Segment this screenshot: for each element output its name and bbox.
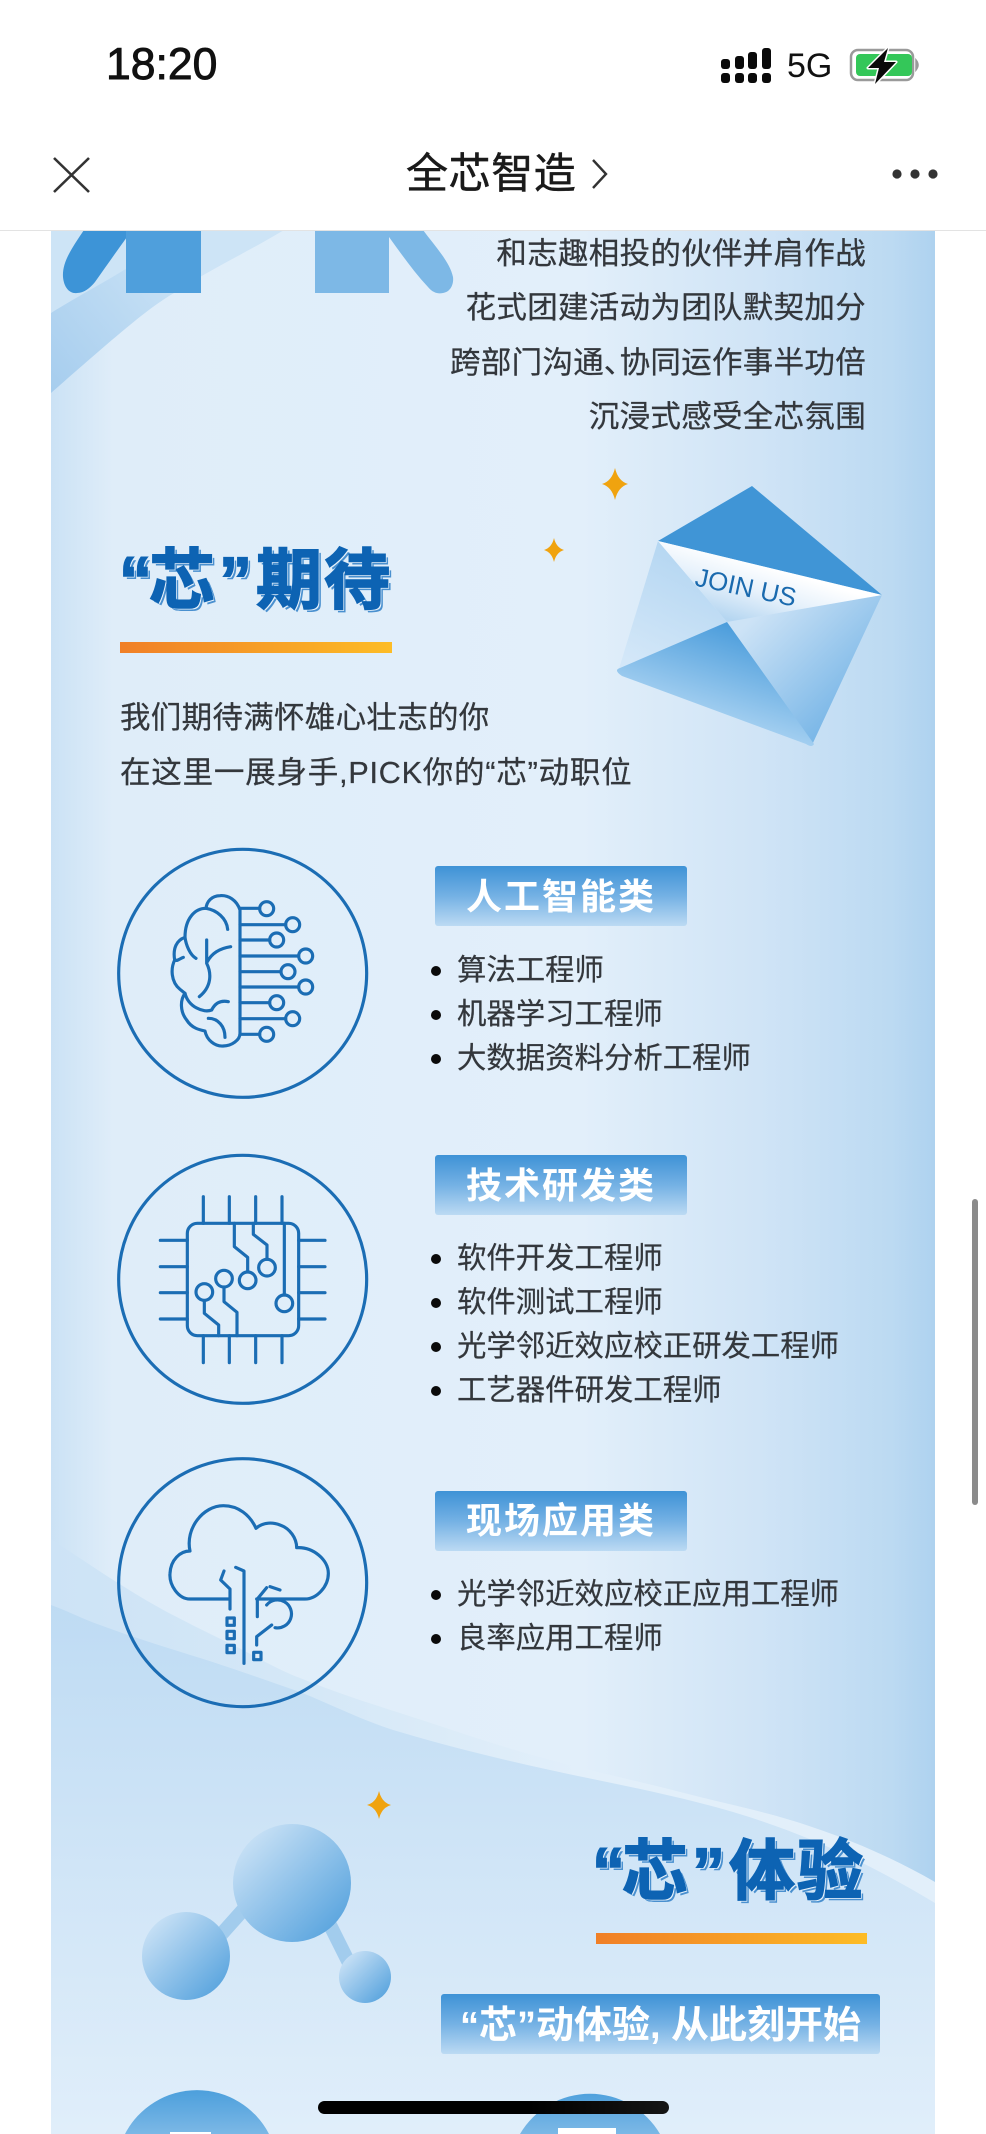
icon: more dots bbox=[892, 169, 938, 179]
label: experience banner: “芯”动体验, 从此刻开始 bbox=[460, 2005, 861, 2047]
category: R&D bbox=[431, 1155, 839, 1407]
scrollbar bbox=[972, 1199, 978, 1505]
label: 现场应用类: 现场应用类 bbox=[466, 1500, 656, 1541]
icon: close bbox=[53, 157, 90, 193]
job list: 机器学习工程师 bbox=[457, 998, 663, 1031]
job list: 软件开发工程师 bbox=[457, 1242, 663, 1275]
heading: “芯”期待: “芯”期待 bbox=[119, 543, 390, 617]
text block: team bullet lines: 和志趣相投的伙伴并肩作战 bbox=[496, 237, 866, 271]
icon: orange sparkle small bbox=[544, 538, 564, 562]
panel: job icons in circles bbox=[117, 848, 368, 1708]
job list: 软件测试工程师 bbox=[457, 1286, 663, 1319]
job list: 算法工程师 bbox=[457, 954, 604, 987]
home indicator bbox=[318, 2101, 669, 2114]
icon: signal bars bbox=[721, 48, 771, 83]
job list: 光学邻近效应校正应用工程师 bbox=[457, 1578, 839, 1611]
category: field application bbox=[431, 1491, 839, 1655]
category: AI bbox=[431, 866, 751, 1075]
job list: 工艺器件研发工程师 bbox=[457, 1374, 722, 1407]
big character fragments at top bbox=[62, 231, 454, 294]
icon: envelope JOIN US bbox=[617, 486, 882, 746]
job list: 大数据资料分析工程师 bbox=[457, 1042, 751, 1075]
job list: 良率应用工程师 bbox=[457, 1622, 663, 1655]
icon: orange sparkle large bbox=[602, 468, 628, 500]
bottom circles with white icons bbox=[125, 2090, 660, 2134]
label: 人工智能类: 人工智能类 bbox=[466, 876, 656, 917]
icon: molecule bbox=[142, 1824, 391, 2003]
orange underline bbox=[596, 1933, 867, 1944]
time: 18:20 bbox=[106, 40, 217, 89]
label: 技术研发类: 技术研发类 bbox=[466, 1165, 656, 1206]
job list: 光学邻近效应校正研发工程师 bbox=[457, 1330, 839, 1363]
heading: “芯”体验: “芯”体验 bbox=[592, 1834, 863, 1908]
text block: intro: 在这里一展身手,PICK你的“芯”动职位 bbox=[120, 756, 632, 790]
label: 人工智能类 bbox=[435, 866, 687, 926]
job list bbox=[431, 1242, 839, 1407]
network: 5G bbox=[787, 47, 832, 85]
job list bbox=[431, 1578, 839, 1655]
orange underline bbox=[120, 642, 392, 653]
text block: team bullet lines: 花式团建活动为团队默契加分 bbox=[466, 291, 866, 325]
job list bbox=[431, 954, 751, 1075]
icon: orange sparkle bbox=[367, 1791, 391, 1819]
label: 技术研发类 bbox=[435, 1155, 687, 1215]
text block: intro bbox=[120, 701, 632, 790]
icon: cloud bbox=[117, 1457, 368, 1708]
text block: team bullet lines: 跨部门沟通、协同运作事半功倍 bbox=[450, 346, 866, 380]
text block: intro: 我们期待满怀雄心壮志的你 bbox=[120, 701, 490, 735]
icon: chevron bbox=[592, 159, 608, 189]
text block: team bullet lines: 沉浸式感受全芯氛围 bbox=[589, 400, 866, 434]
label: experience banner bbox=[441, 1994, 880, 2054]
panel: blue background with swooshes bbox=[51, 231, 935, 2134]
text block: team bullet lines bbox=[450, 237, 866, 434]
icon: brain with circuits bbox=[117, 848, 368, 1099]
top bar: status and navigation bbox=[0, 0, 986, 231]
icon: envelope JOIN US: JOIN US bbox=[693, 562, 799, 613]
icon: chip bbox=[117, 1154, 368, 1405]
nav title: 全芯智造 bbox=[406, 150, 576, 197]
icon: battery bbox=[850, 48, 919, 84]
label: 现场应用类 bbox=[435, 1491, 687, 1551]
